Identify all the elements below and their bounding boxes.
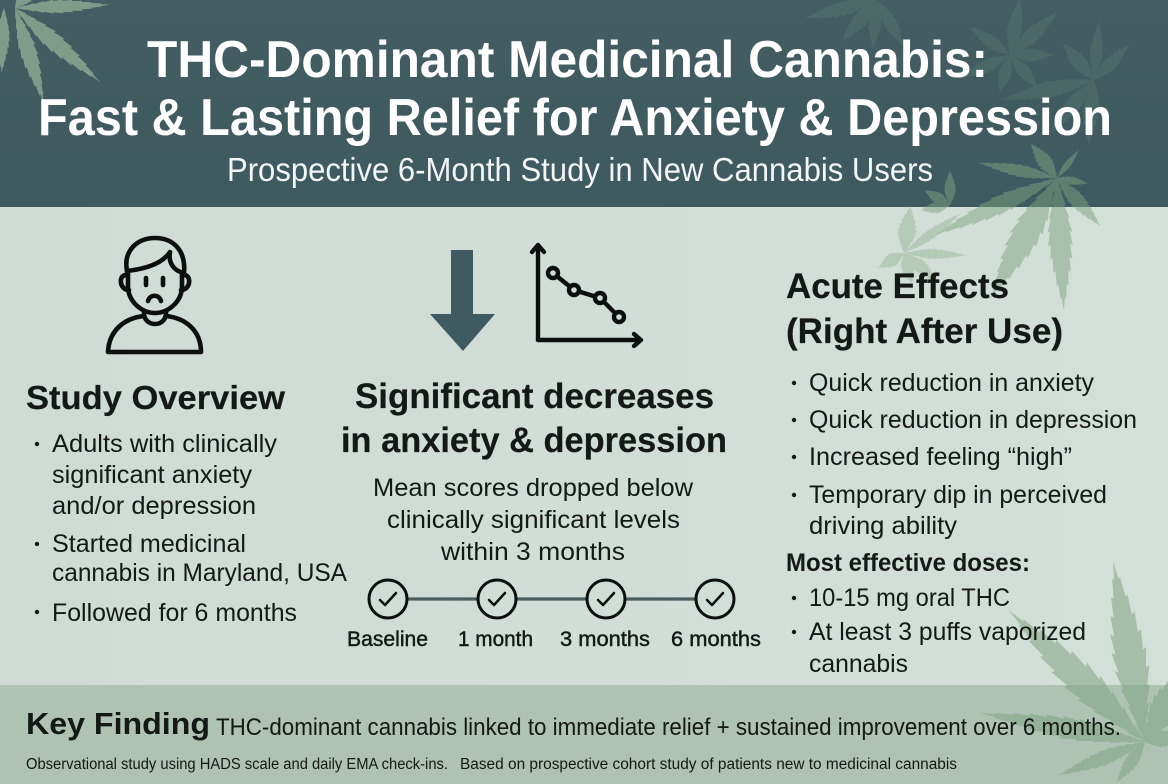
text block: acute effects bullets: Quick reduction in depression — [809, 406, 1137, 434]
panel: footer band — [0, 685, 1168, 784]
panel: study overview — [26, 379, 347, 627]
panel: central result — [341, 377, 761, 651]
text block: study overview bullets: significant anxiety — [52, 461, 253, 489]
title: Fast & Lasting Relief for Anxiety & Depression — [38, 89, 1112, 147]
icon: 1 month check — [478, 580, 516, 618]
timeline labels — [347, 628, 761, 651]
text block: study overview bullets: Adults with clinically — [52, 430, 277, 458]
icon: large down arrow — [430, 250, 495, 351]
text block: key finding statement: THC-dominant cannabis linked to immediate relief + sustained improvement over 6 months. — [216, 714, 1121, 741]
title — [38, 31, 1112, 147]
subtitle: Prospective 6-Month Study in New Cannabis Users — [227, 151, 933, 188]
text block: doses bullets: 10-15 mg oral THC — [809, 584, 1010, 612]
icon: baseline check — [369, 580, 407, 618]
panel: header band — [0, 0, 1168, 207]
heading: acute effects — [786, 267, 1063, 351]
icon: cannabis leaf right of header — [919, 138, 1106, 311]
text block: method note: Observational study using HADS scale and daily EMA check-ins. — [26, 756, 448, 773]
icon: declining line chart — [532, 245, 641, 346]
heading: significant decreases — [341, 377, 727, 460]
text block: mean scores: clinically significant levels — [387, 506, 680, 534]
text block: acute effects bullets: Temporary dip in perceived — [809, 481, 1107, 509]
text block: source note: Based on prospective cohort study of patients new to medicinal cannabis — [460, 756, 957, 773]
timeline labels: Baseline — [347, 628, 428, 651]
text block: doses bullets — [792, 584, 1086, 678]
text block: acute effects bullets: driving ability — [809, 512, 958, 540]
icon: cannabis leaf top left — [0, 0, 110, 106]
text block: acute effects bullets — [792, 369, 1137, 540]
text block: doses bullets: cannabis — [809, 650, 908, 678]
panel: acute effects — [786, 267, 1137, 678]
icon: cannabis leaf bottom right — [978, 559, 1168, 784]
text block: study overview bullets: cannabis in Maryland, USA — [52, 559, 347, 587]
heading: acute effects: (Right After Use) — [786, 312, 1063, 351]
text block: mean scores: within 3 months — [440, 538, 625, 566]
icon: 3 months check — [587, 580, 625, 618]
panel: body background — [0, 207, 1168, 685]
timeline labels: 6 months — [671, 628, 761, 651]
text block: study overview bullets: Followed for 6 months — [52, 599, 297, 627]
heading: most effective doses: Most effective doses: — [786, 549, 1030, 577]
icon: 6 months check — [696, 580, 734, 618]
heading: study overview: Study Overview — [26, 379, 285, 416]
heading: key finding: Key Finding — [26, 706, 210, 741]
icon: faint cannabis leaves top right — [802, 0, 1134, 146]
title: THC-Dominant Medicinal Cannabis: — [147, 31, 988, 89]
timeline — [347, 580, 761, 651]
text block: study overview bullets: Started medicinal — [52, 530, 246, 558]
heading: acute effects: Acute Effects — [786, 267, 1009, 306]
text block: study overview bullets — [35, 430, 347, 627]
text block: mean scores — [373, 474, 694, 566]
heading: significant decreases: in anxiety & depression — [341, 421, 727, 460]
panel: key finding — [26, 706, 1121, 773]
text block: doses bullets: At least 3 puffs vaporized — [809, 618, 1086, 646]
text block: study overview bullets: and/or depression — [52, 492, 256, 520]
text block: acute effects bullets: Quick reduction in anxiety — [809, 369, 1094, 397]
text block: acute effects bullets: Increased feeling “high” — [809, 443, 1072, 471]
heading: significant decreases: Significant decreases — [355, 377, 714, 416]
icon: cannabis leaf behind acute effects — [874, 204, 968, 287]
icon: sad person — [108, 238, 201, 352]
timeline labels: 3 months — [560, 628, 650, 651]
text block: mean scores: Mean scores dropped below — [373, 474, 694, 502]
timeline labels: 1 month — [458, 628, 533, 651]
